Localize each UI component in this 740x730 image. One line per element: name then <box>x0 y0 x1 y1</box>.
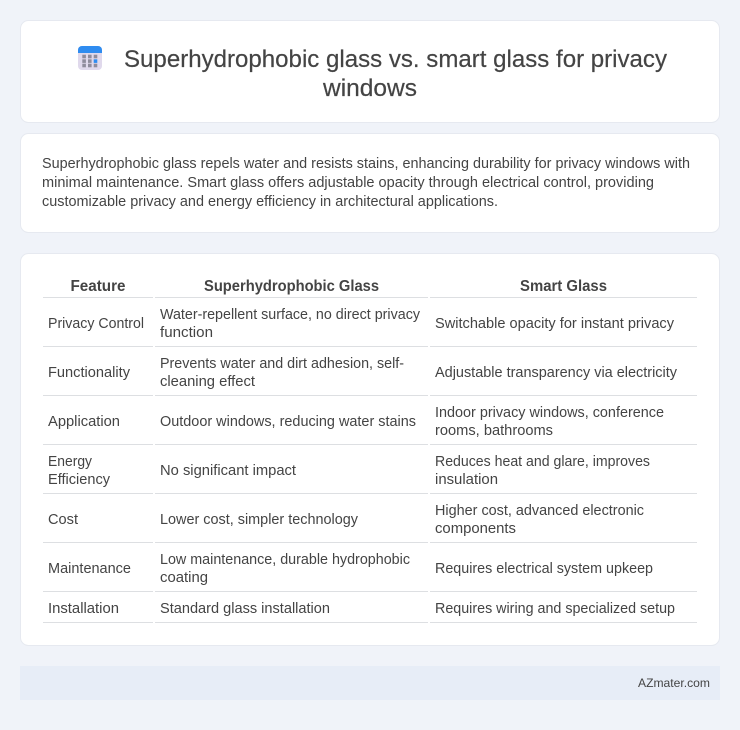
heading: title: Superhydrophobic glass vs. smart glass for privacy <box>124 46 667 73</box>
row: privacy control: function <box>160 325 213 341</box>
row: functionality: Prevents water and dirt adhesion, self- <box>160 356 404 372</box>
text block: summary text: minimal maintenance. Smart glass offers adjustable opacity through electrical control, providing <box>42 175 654 191</box>
table header: Smart Glass <box>520 278 607 295</box>
row: cost <box>48 503 644 537</box>
row: maintenance: Maintenance <box>48 561 131 577</box>
row: energy efficiency: No significant impact <box>160 463 296 479</box>
row: maintenance: Requires electrical system upkeep <box>435 561 653 577</box>
row: maintenance <box>48 552 653 586</box>
row: privacy control: Privacy Control <box>48 316 144 332</box>
table header <box>70 278 607 295</box>
row: application: Indoor privacy windows, conference <box>435 405 664 421</box>
row: installation <box>48 601 675 617</box>
row: functionality <box>48 356 678 390</box>
row: energy efficiency: Reduces heat and glare, improves <box>435 454 650 470</box>
row: energy efficiency: insulation <box>435 472 498 488</box>
row: cost: Cost <box>48 512 78 528</box>
heading: title <box>124 46 667 102</box>
text block: summary text: customizable privacy and energy efficiency in architectural applications. <box>42 194 498 210</box>
row: functionality: Functionality <box>48 365 131 381</box>
panel: title card <box>20 20 720 122</box>
row: energy efficiency: Energy <box>48 454 93 470</box>
row: cost: components <box>435 521 516 537</box>
row: application <box>48 405 664 439</box>
row: functionality: cleaning effect <box>160 374 255 390</box>
row: energy efficiency <box>48 454 650 488</box>
row: installation: Requires wiring and specialized setup <box>435 601 675 617</box>
row: application: rooms, bathrooms <box>435 423 553 439</box>
row: functionality: Adjustable transparency via electricity <box>435 365 678 381</box>
panel: summary <box>20 134 720 232</box>
row: installation: Standard glass installation <box>160 601 330 617</box>
text block: summary text: Superhydrophobic glass repels water and resists stains, enhancing durability for privacy windows with <box>42 156 690 172</box>
row: privacy control: Water-repellent surface, no direct privacy <box>160 307 421 323</box>
icon: calendar <box>78 46 102 70</box>
row: application: Outdoor windows, reducing water stains <box>160 414 416 430</box>
row: application: Application <box>48 414 120 430</box>
heading: title: windows <box>322 75 417 102</box>
row: maintenance: Low maintenance, durable hydrophobic <box>160 552 410 568</box>
row: installation: Installation <box>48 601 119 617</box>
row: privacy control <box>48 307 675 341</box>
table header: Feature <box>70 278 126 295</box>
table header: Superhydrophobic Glass <box>204 278 379 295</box>
text block: summary text <box>42 156 690 210</box>
footer bar <box>20 666 720 700</box>
row: cost: Lower cost, simpler technology <box>160 512 359 528</box>
panel: comparison table <box>20 254 720 646</box>
row: maintenance: coating <box>160 570 208 586</box>
row: energy efficiency: Efficiency <box>48 472 111 488</box>
row: privacy control: Switchable opacity for instant privacy <box>435 316 675 332</box>
row: cost: Higher cost, advanced electronic <box>435 503 644 519</box>
footer: brand: AZmater.com <box>638 676 710 690</box>
